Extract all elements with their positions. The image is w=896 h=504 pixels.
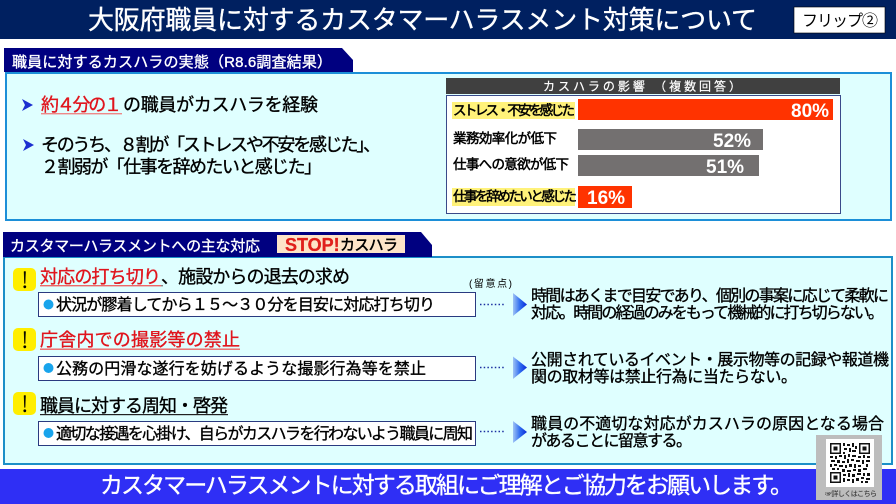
bar: stress 80%: 80% — [791, 101, 829, 122]
arrow — [480, 293, 527, 316]
note: 公開されているイベント・展示物等の記録や報道機 — [531, 351, 889, 369]
bar: motivation 51%: 51% — [706, 157, 744, 178]
bar: stress 80%: ストレス・不安を感じた — [453, 102, 575, 118]
rule box — [38, 292, 476, 316]
note: 対応。時間の経過のみをもって機械的に打ち切らない。 — [531, 304, 884, 322]
rule box — [38, 356, 476, 380]
rule box: 適切な接遇を心掛け、自らがカスハラを行わないよう職員に周知 — [56, 425, 473, 443]
QR code card: ☞詳しくはこちら — [825, 489, 877, 498]
bar: motivation 51% — [453, 155, 759, 178]
note label: (留意点) — [469, 277, 512, 290]
bar: efficiency 52%: 52% — [713, 131, 751, 152]
arrow — [480, 356, 527, 379]
note — [531, 415, 884, 450]
title band — [0, 0, 896, 39]
chart title — [446, 78, 840, 94]
heading: survey findings — [4, 48, 353, 72]
badge: stop kasuhara — [277, 235, 405, 255]
closing banner — [0, 469, 896, 504]
note: があることに留意する。 — [531, 432, 692, 450]
item 1: ending the response — [13, 267, 889, 322]
heading: main responses: カスタマーハラスメントへの主な対応 — [10, 238, 260, 255]
badge: stop kasuhara: STOP! — [285, 235, 340, 255]
note — [531, 287, 889, 322]
title: 大阪府職員に対するカスタマーハラスメント対策について — [88, 5, 757, 35]
flip label: フリップ② — [802, 12, 878, 30]
bullet: one quarter of staff: 約４分の１ — [41, 95, 122, 115]
bullet: one quarter of staff: の職員がカスハラを経験 — [123, 95, 318, 115]
bar: efficiency 52% — [453, 129, 763, 152]
icon: warning — [13, 392, 36, 415]
flip label — [794, 7, 885, 33]
badge: stop kasuhara: カスハラ — [340, 237, 398, 254]
heading: survey findings: 職員に対するカスハラの実態（R8.6調査結果） — [12, 54, 332, 71]
heading: main responses — [3, 232, 432, 257]
icon: warning — [13, 328, 36, 351]
QR code card — [816, 435, 882, 500]
bar: want to quit 16% — [452, 186, 632, 209]
note — [531, 351, 889, 386]
bar: stress 80% — [452, 99, 833, 122]
bullet: stress and quitting — [23, 135, 381, 177]
closing banner: カスタマーハラスメントに対する取組にご理解とご協力をお願いします。 — [100, 472, 793, 498]
bar: want to quit 16%: 16% — [587, 188, 625, 209]
note: 時間はあくまで目安であり、個別の事案に応じて柔軟に — [531, 287, 889, 305]
note: 職員の不適切な対応がカスハラの原因となる場合 — [531, 415, 884, 433]
chart title: カスハラの影響 （複数回答） — [543, 78, 741, 94]
icon: warning — [13, 268, 36, 291]
item 3: staff awareness: 職員に対する周知・啓発 — [40, 396, 228, 416]
item 2: no filming — [13, 328, 889, 386]
bullet: stress and quitting: そのうち、８割が「ストレスや不安を感じた」、 — [41, 135, 381, 155]
rule box: 状況が膠着してから１５～３０分を目安に対応打ち切り — [56, 296, 435, 314]
arrow — [480, 421, 527, 443]
item 1: ending the response: 、施設からの退去の求め — [161, 267, 350, 287]
bullet: one quarter of staff — [22, 95, 318, 115]
rule box — [38, 422, 476, 446]
rule box: 公務の円滑な遂行を妨げるような撮影行為等を禁止 — [56, 360, 426, 378]
bar: efficiency 52%: 業務効率化が低下 — [453, 131, 557, 146]
panel: main responses — [3, 232, 892, 464]
item 1: ending the response: 対応の打ち切り — [40, 267, 161, 287]
item 2: no filming: 庁舎内での撮影等の禁止 — [40, 330, 240, 350]
bar: motivation 51%: 仕事への意欲が低下 — [453, 157, 569, 172]
panel: survey findings — [4, 48, 891, 220]
bar chart: effects of harassment — [446, 78, 840, 214]
item 3: staff awareness — [13, 392, 884, 450]
bullet: stress and quitting: ２割弱が「仕事を辞めたいと感じた」 — [41, 157, 322, 177]
note: 関の取材等は禁止行為に当たらない。 — [531, 368, 797, 386]
bar: want to quit 16%: 仕事を辞めたいと感じた — [453, 188, 577, 204]
